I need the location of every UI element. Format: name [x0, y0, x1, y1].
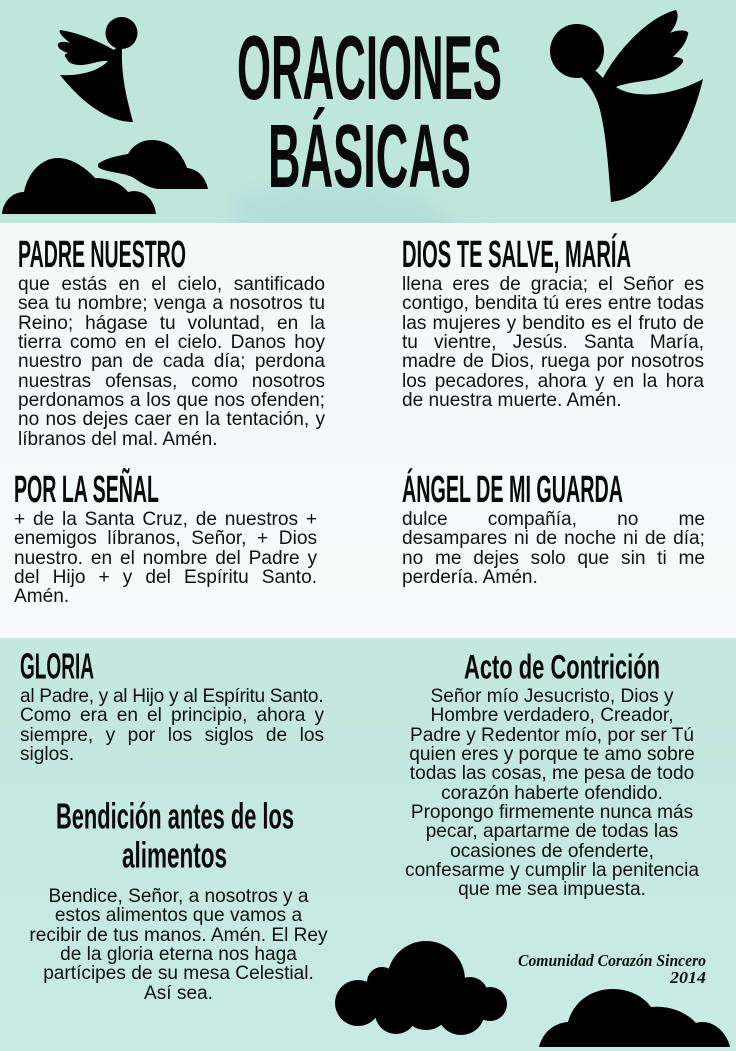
text: Gloria: siglos.: [20, 744, 74, 765]
text: Ángel de mi guarda: perdería. Amén.: [402, 567, 538, 588]
text: Por la señal: + de la Santa Cruz, de nuestros +: [14, 509, 317, 530]
text: Dios te salve: las mujeres y bendito es el fruto de: [402, 313, 704, 334]
text: Padre Nuestro: perdonamos a los que nos ofenden;: [18, 390, 325, 411]
text: Por la señal: del Hijo + y del Espíritu Santo.: [14, 567, 317, 588]
text: Acto de Contrición: pecar, apartarme de todas las: [426, 821, 678, 842]
heading: Bendición: [56, 796, 294, 876]
icon: top left clouds: [2, 140, 208, 214]
text: Padre Nuestro: que estás en el cielo, santificado: [18, 274, 325, 295]
text: Ángel de mi guarda: desampares ni de noche ni de día;: [402, 528, 705, 549]
text: Acto de Contrición: Señor mío Jesucristo, Dios y: [430, 686, 674, 707]
title: [237, 18, 502, 207]
text: Gloria: Como era en el principio, ahora y: [20, 705, 324, 726]
text: Acto de Contrición: Hombre verdadero, Creador,: [430, 705, 674, 726]
text: Acto de Contrición: todas las cosas, me pesa de todo: [410, 763, 694, 784]
title: BÁSICAS: [268, 106, 471, 207]
text: Dios te salve: los pecadores, ahora y en la hora: [402, 371, 704, 392]
panel: Bendición antes de los alimentos: [29, 796, 328, 1004]
heading: Padre Nuestro: PADRE NUESTRO: [18, 234, 186, 276]
text: Bendición: Así sea.: [144, 983, 213, 1004]
text: Dios te salve: [402, 274, 704, 411]
text: Padre Nuestro: no nos dejes caer en la tentación, y: [18, 409, 325, 430]
text: Padre Nuestro: nuestro pan de cada día; perdona: [18, 351, 325, 372]
heading: Bendición: alimentos: [122, 834, 227, 876]
text: Por la señal: Amén.: [14, 586, 69, 607]
text: Por la señal: [14, 509, 317, 607]
text: Dios te salve: madre de Dios, ruega por nosotros: [402, 351, 704, 372]
signature: Comunidad Corazón Sincero: [518, 951, 706, 970]
text: Por la señal: nuestro. en el nombre del Padre y: [14, 548, 317, 569]
text: Acto de Contrición: ocasiones de ofenderte,: [450, 841, 654, 862]
panel: Por la señal: [14, 467, 317, 607]
panel: Acto de Contrición: [405, 648, 699, 900]
text: Ángel de mi guarda: dulce compañía, no me: [402, 509, 705, 530]
text: Bendición: partícipes de su mesa Celestial.: [43, 963, 314, 984]
text: Bendición: de la gloria eterna nos haga: [60, 944, 297, 965]
icon: small angel: [58, 17, 138, 122]
text: Acto de Contrición: confesarme y cumplir la penitencia: [405, 860, 699, 881]
text: Bendición: estos alimentos que vamos a: [55, 905, 302, 926]
text: Bendición: recibir de tus manos. Amén. El Rey: [29, 925, 328, 946]
text: Padre Nuestro: nuestras ofensas, como nosotros: [18, 371, 325, 392]
text: Gloria: [20, 686, 324, 765]
text: Padre Nuestro: Reino; hágase tu voluntad, en la: [18, 313, 325, 334]
heading: Por la señal: POR LA SEÑAL: [14, 467, 159, 511]
text: Acto de Contrición: Propongo firmemente nunca más: [411, 802, 693, 823]
text: Padre Nuestro: sea tu nombre; venga a nosotros tu: [18, 293, 325, 314]
text: Acto de Contrición: [405, 686, 699, 900]
text: Acto de Contrición: corazón haberte ofendido.: [441, 783, 663, 804]
text: Acto de Contrición: que me sea impuesta.: [458, 879, 646, 900]
text: Acto de Contrición: quien eres y porque te amo sobre: [409, 744, 695, 765]
panel: Padre Nuestro: [18, 234, 325, 450]
text: Ángel de mi guarda: no me dejes solo que sin ti me: [402, 548, 705, 569]
text: Bendición: Bendice, Señor, a nosotros y a: [48, 886, 309, 907]
text: Dios te salve: contigo, bendita tú eres entre todas: [402, 293, 704, 314]
text: Gloria: al Padre, y al Hijo y al Espíritu Santo.: [20, 686, 323, 707]
panel: Gloria: [20, 646, 324, 765]
text: Dios te salve: tu vientre, Jesús. Santa María,: [402, 332, 704, 353]
icon: large angel: [550, 10, 703, 202]
text: Por la señal: enemigos líbranos, Señor, + Dios: [14, 528, 317, 549]
text: Ángel de mi guarda: [402, 509, 705, 588]
text: Dios te salve: llena eres de gracia; el Señor es: [402, 274, 704, 295]
text: Gloria: siempre, y por los siglos de los: [20, 725, 324, 746]
text: Bendición: [29, 886, 328, 1004]
signature: 2014: [669, 968, 706, 987]
text: Padre Nuestro: [18, 274, 325, 450]
panel: Dios te salve: [402, 232, 704, 411]
text: Padre Nuestro: líbranos del mal. Amén.: [18, 429, 218, 450]
heading: Gloria: GLORIA: [20, 646, 94, 686]
text: Padre Nuestro: tierra como en el cielo. Danos hoy: [18, 332, 325, 353]
panel: Ángel de mi guarda: [402, 467, 705, 588]
text: Dios te salve: de nuestra muerte. Amén.: [402, 390, 622, 411]
text: Acto de Contrición: Padre y Redentor mío, por ser Tú: [410, 725, 694, 746]
